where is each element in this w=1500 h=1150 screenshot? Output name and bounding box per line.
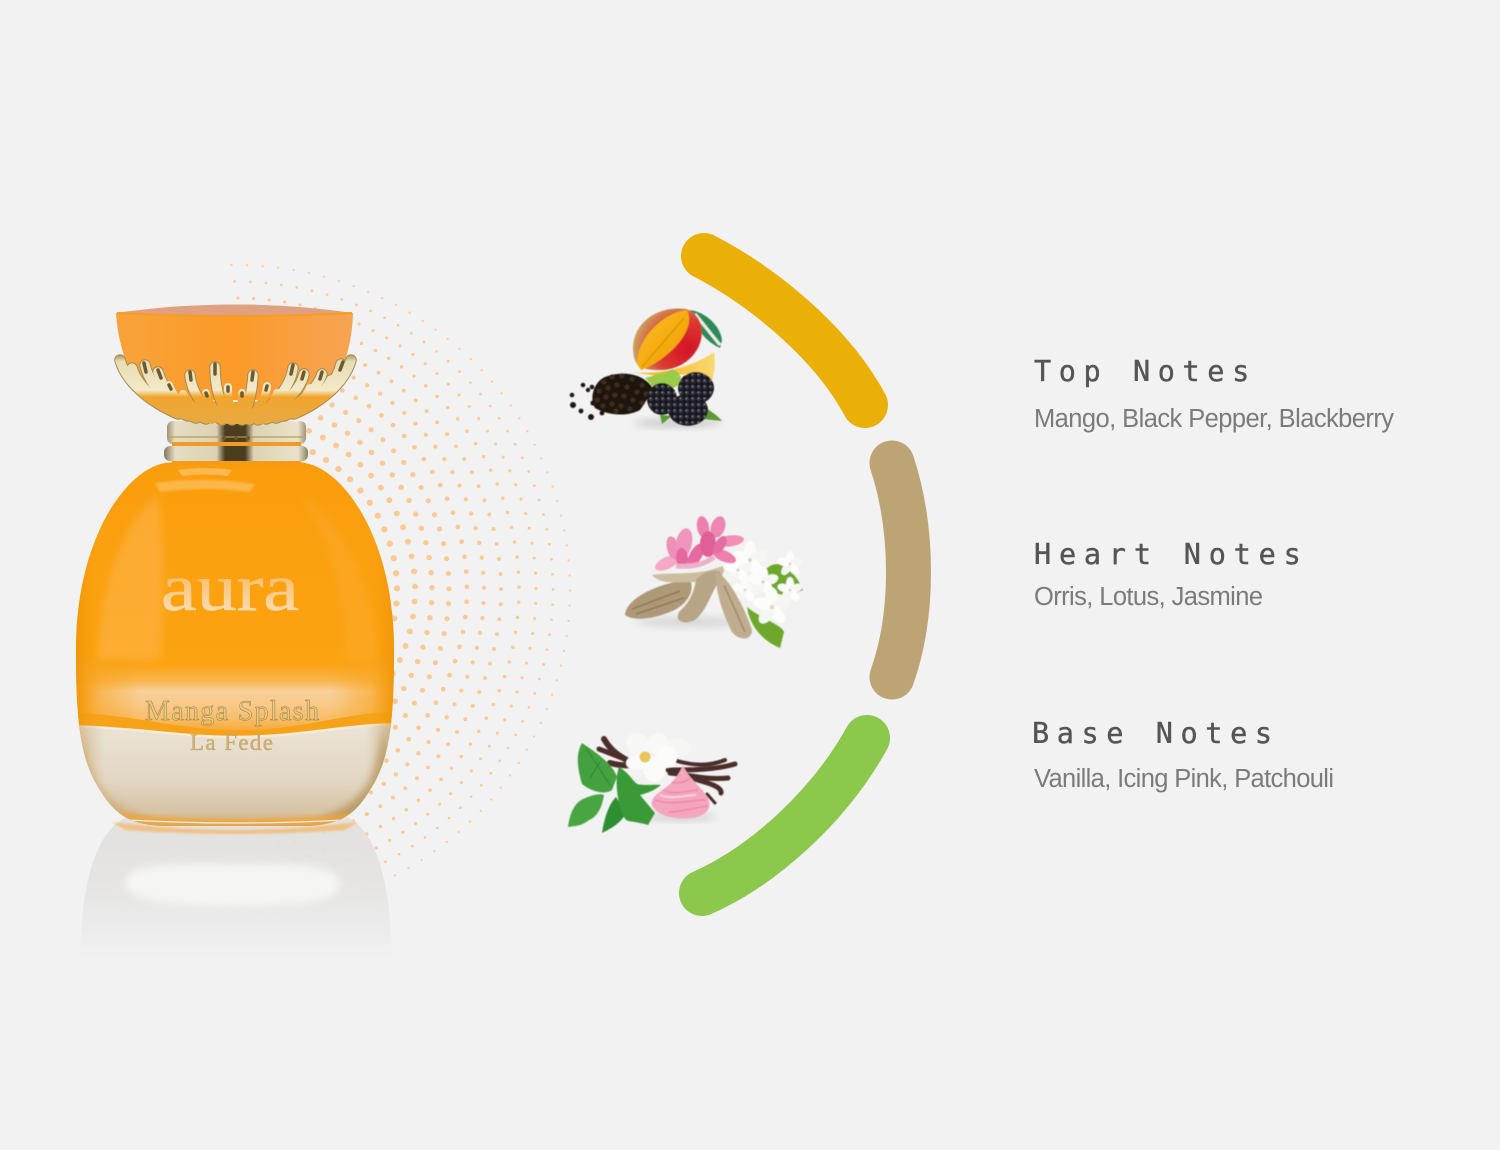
white flower: [622, 728, 691, 784]
text: base notes list: Vanilla, Icing Pink, Patchouli: [1034, 765, 1334, 793]
product name: Manga Splash: Manga Splash: [145, 696, 319, 727]
mango slice: [630, 352, 715, 384]
gold crown: [114, 358, 355, 424]
orange liquid line: [70, 711, 400, 738]
vanilla pods: [599, 739, 735, 803]
mango fruit: [633, 308, 702, 370]
crown inner petals: [169, 385, 310, 420]
clear base: [70, 725, 400, 830]
base notes arc: [702, 738, 867, 893]
ingredients: mango, black pepper, blackberry: [570, 308, 722, 427]
heading: Top Notes: Top Notes: [1034, 355, 1257, 388]
mango leaf: [690, 310, 722, 348]
jasmine flowers: [723, 541, 804, 626]
bottle reflection: [80, 814, 392, 968]
crown petal shadows: [144, 362, 343, 396]
heading: Base Notes: Base Notes: [1032, 717, 1280, 750]
patchouli leaves: [568, 743, 661, 833]
jasmine leaves: [747, 607, 784, 648]
neck and collar: [164, 421, 308, 465]
side orange above the liquid line: [70, 660, 400, 730]
ingredients: orris, lotus, jasmine: [625, 514, 804, 648]
heart notes arc: [892, 463, 908, 677]
text: top notes list: Mango, Black Pepper, Blackberry: [1034, 405, 1394, 433]
left glass sheen: [98, 495, 164, 660]
glass body: [70, 455, 400, 830]
black pepper pile: [592, 374, 652, 414]
base orange rim: [118, 812, 352, 826]
shoulder highlight: [155, 480, 255, 492]
leaves: [645, 369, 681, 395]
brand text: aura: aura: [161, 551, 299, 625]
right glass sheen: [310, 505, 376, 660]
halftone dot halo behind bottle: [230, 264, 572, 916]
cap: [116, 304, 353, 400]
body edge shading: [76, 544, 394, 725]
perfume bottle: [70, 304, 400, 830]
lotus flowers: [653, 514, 745, 574]
heading: Heart Notes: Heart Notes: [1034, 538, 1309, 571]
brand name: La Fede: La Fede: [190, 730, 273, 755]
orris roots: [625, 580, 692, 619]
text: heart notes list: Orris, Lotus, Jasmine: [1034, 583, 1263, 611]
pink meringue: [652, 765, 709, 818]
blackberries: [647, 383, 677, 415]
base side shading: [82, 740, 142, 818]
crown outer petals: [120, 360, 351, 420]
top notes arc: [704, 256, 865, 405]
ingredients: vanilla, icing pink, patchouli: [568, 728, 735, 833]
